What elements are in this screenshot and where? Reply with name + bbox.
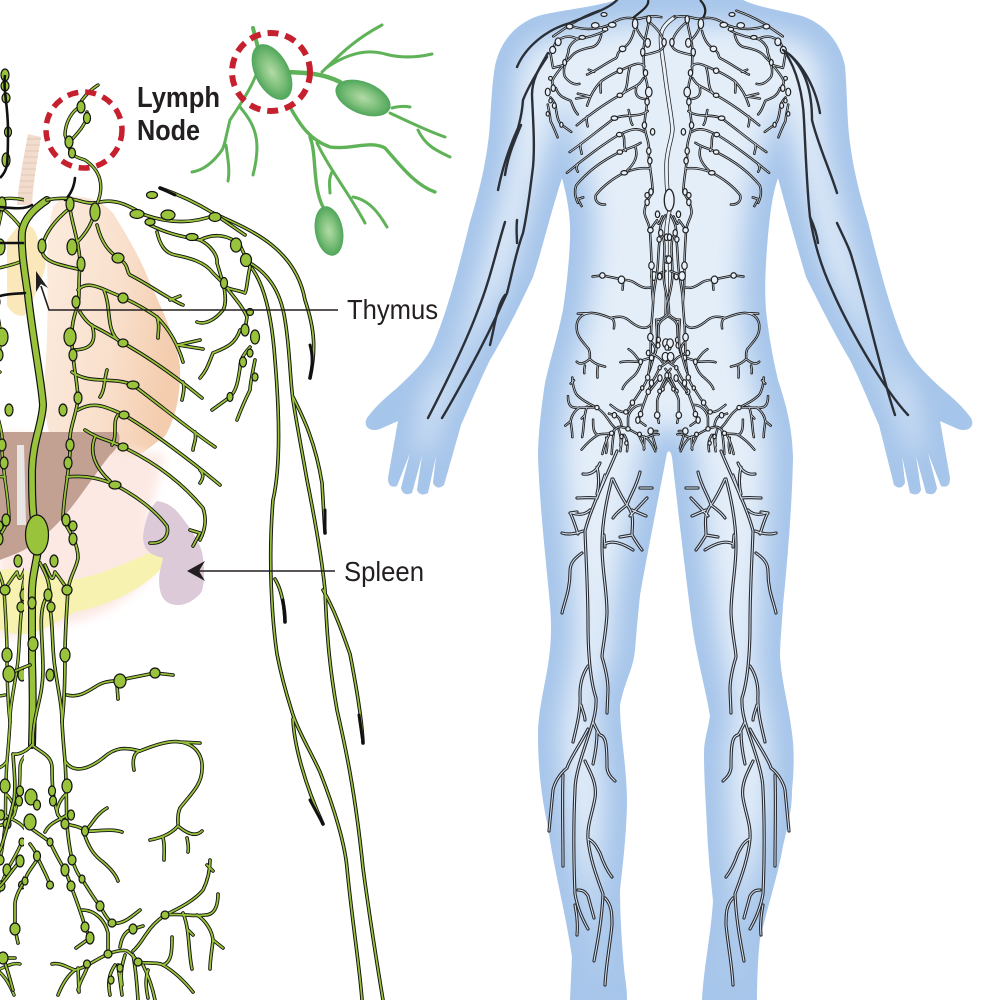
lymph node heading: [137, 82, 220, 147]
callout circle on enlarged node: [232, 33, 310, 111]
afferent and efferent vessels: [192, 25, 450, 227]
enlarged lymph node illustration: [192, 25, 450, 258]
pancreas: [0, 549, 164, 634]
node 1: [243, 38, 301, 106]
thymus label: Thymus: [347, 294, 438, 325]
aorta sliver: [17, 445, 26, 525]
lymph node heading: Node: [137, 115, 200, 147]
liver: [0, 432, 120, 560]
neck vessels: [633, 0, 705, 18]
leg vessels, left leg: [549, 451, 652, 985]
lymph node heading: Lymph: [137, 82, 220, 114]
lung: [43, 196, 180, 470]
trachea: [17, 134, 41, 205]
black connecting vessels: [0, 178, 75, 296]
thoracic duct: [22, 200, 48, 745]
black tapered vessel ends: [160, 188, 363, 824]
torso lymph vessels, right half: [648, 11, 791, 454]
trachea rings: [18, 139, 41, 193]
node 2: [330, 72, 396, 124]
neck vessel to node: [65, 85, 101, 204]
branch vessels: [0, 188, 255, 1000]
leg vessels, right leg: [686, 451, 789, 985]
panel: lymphatic body figure: [366, 0, 972, 1000]
lymph nodes: [0, 69, 260, 984]
green lymph network: [0, 69, 383, 1000]
torso lymph vessels, left half: [545, 11, 688, 454]
spleen pointer arrow: [187, 561, 335, 581]
thymus pointer arrow: [36, 271, 338, 310]
arm vessels: [428, 0, 908, 418]
callout circle on network: [46, 92, 122, 168]
node 3: [311, 204, 347, 258]
long arm vessels: [213, 213, 383, 1000]
mirrored left portion of network: [0, 196, 24, 997]
spleen: [143, 501, 204, 605]
body silhouette: [366, 0, 972, 1000]
thymus: [7, 225, 46, 316]
spleen label: Spleen: [344, 556, 424, 587]
panel: close-up anatomy: [0, 134, 204, 640]
stomach: [0, 432, 165, 640]
